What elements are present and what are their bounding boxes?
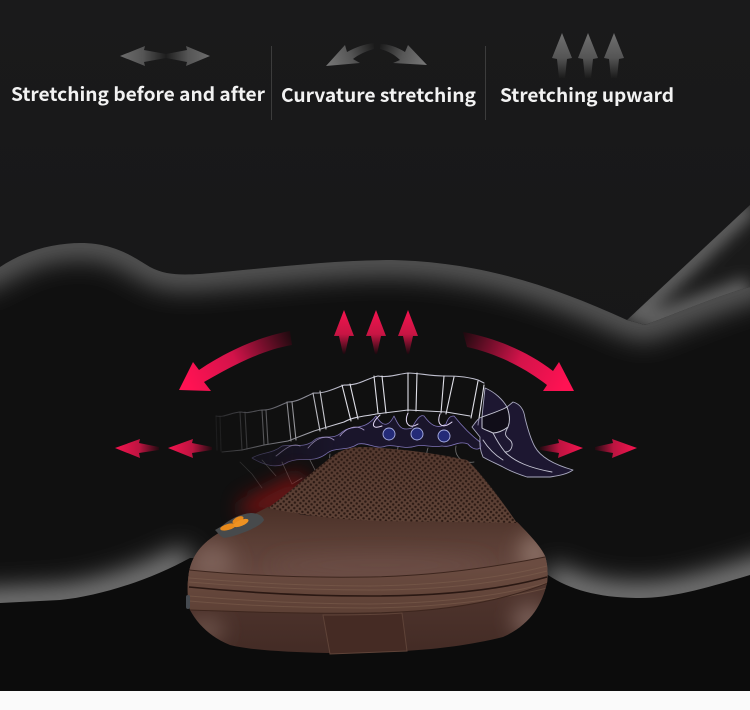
icon: curved arrows (326, 43, 427, 66)
icon: three up arrows (552, 33, 624, 78)
upper leather (188, 514, 548, 585)
torso shape with edge glow (0, 230, 750, 610)
sacrum tail (472, 388, 573, 477)
zipper band (180, 555, 560, 613)
zipper seam (189, 577, 547, 596)
red arrow: curved right (463, 332, 574, 391)
label: before and after: Stretching before and after (11, 80, 266, 107)
vertebra outline top and bottom (216, 373, 484, 416)
red arrows: horizontal right (540, 439, 637, 458)
velcro strap (323, 613, 407, 654)
leather shell (188, 507, 548, 653)
lower leather (188, 584, 547, 653)
icon: double horizontal arrows (120, 46, 210, 66)
red glow behind pillow (240, 472, 312, 518)
massage pillow (180, 447, 560, 660)
raised leg shape (627, 205, 750, 325)
area below body (0, 540, 750, 691)
spine illustration (216, 373, 573, 488)
upper leather repeat (190, 514, 546, 577)
process chain (252, 416, 481, 466)
mesh top (268, 447, 517, 523)
leather highlights (185, 533, 551, 642)
header: curvature stretching (281, 43, 477, 108)
divider one (271, 46, 272, 120)
side switch (186, 595, 190, 609)
bottom white strip (0, 691, 750, 710)
label: upward: Stretching upward (500, 81, 674, 108)
spinal processes (240, 413, 481, 488)
header: stretching before and after (11, 46, 266, 107)
red arrows: horizontal left (115, 439, 212, 458)
label: curvature: Curvature stretching (281, 81, 477, 108)
control button (215, 513, 264, 538)
divider two (485, 46, 486, 120)
body silhouette (0, 205, 750, 691)
red arrow: curved left (179, 331, 292, 391)
red arrows: three upward (334, 310, 418, 354)
header: stretching upward (500, 33, 674, 108)
vertebra walls (216, 373, 484, 451)
